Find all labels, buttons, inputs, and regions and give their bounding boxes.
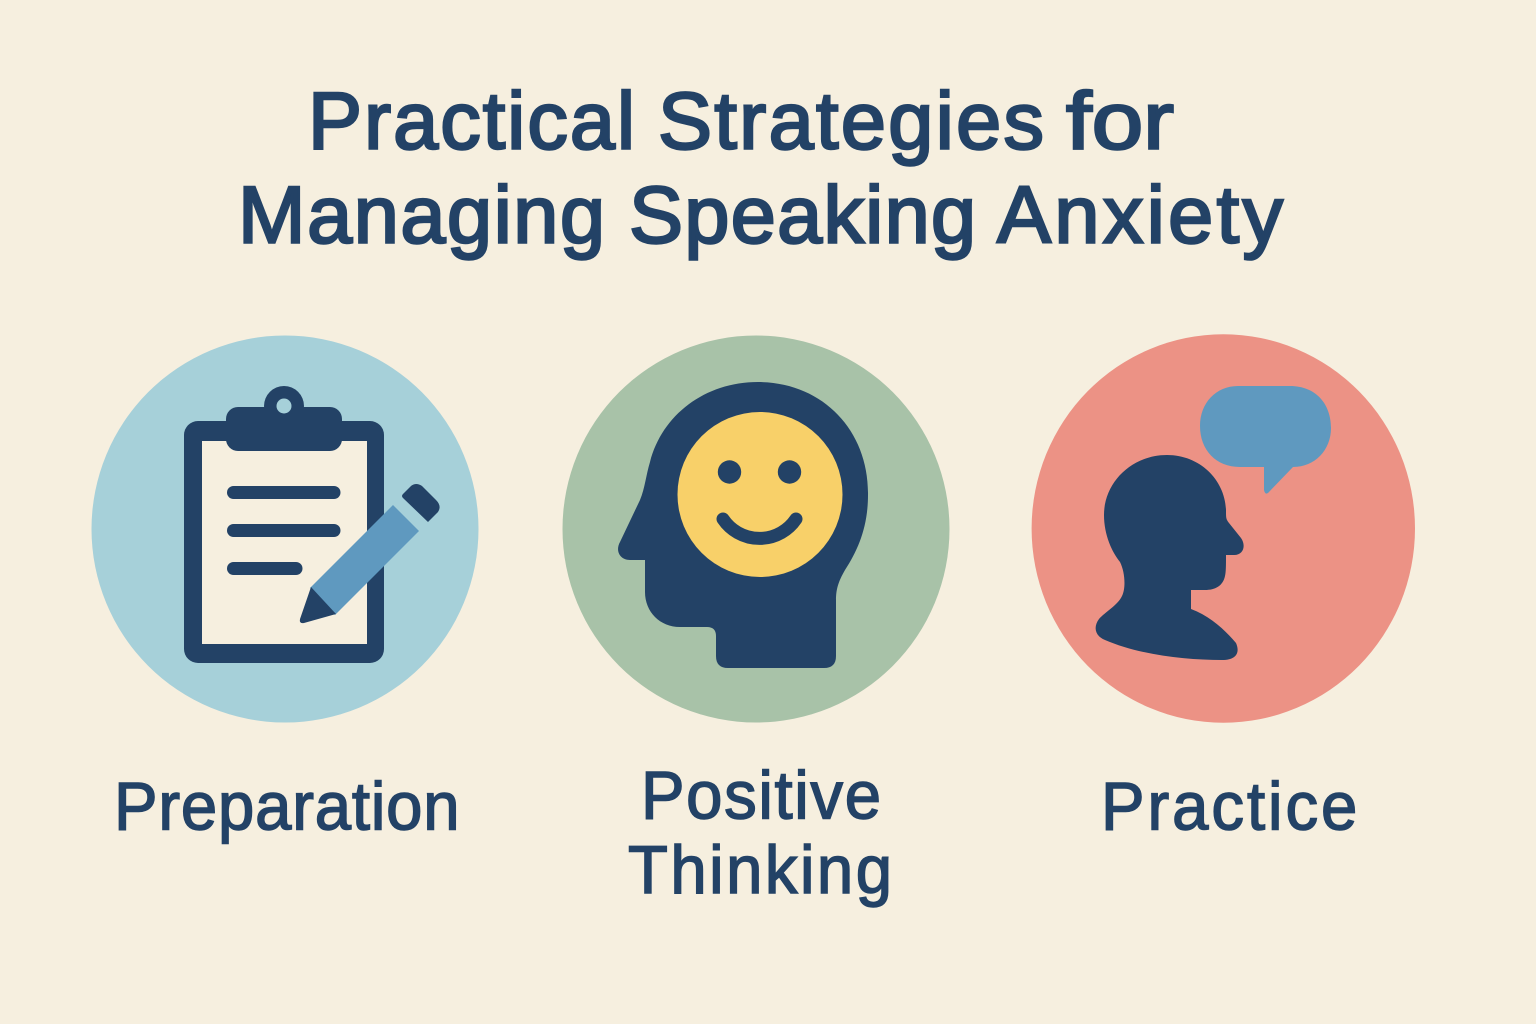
- icon: speaking head: [1096, 455, 1244, 660]
- label: positive thinking: Thinking: [628, 833, 892, 908]
- title: Speaking: [629, 170, 976, 260]
- label: preparation: Preparation: [114, 769, 460, 845]
- title: [238, 76, 1284, 260]
- title: Anxiety: [997, 170, 1284, 260]
- title: Practical: [308, 76, 635, 166]
- title: Strategies: [658, 76, 1044, 166]
- icon circle: practice: [1032, 334, 1415, 723]
- label: positive thinking: [628, 758, 892, 908]
- label: practice: Practice: [1101, 769, 1357, 845]
- icon circle: positive thinking: [562, 336, 950, 722]
- title: Managing: [238, 170, 605, 260]
- panel: positive thinking: [562, 336, 950, 908]
- title: for: [1066, 76, 1174, 166]
- icon circle: preparation: [92, 336, 478, 722]
- icon: speech bubble: [1200, 386, 1331, 494]
- panel: preparation: [92, 336, 478, 845]
- icon: head with smiling face: [618, 382, 868, 668]
- panel: practice: [1032, 334, 1415, 845]
- icon: clipboard and pencil: [184, 386, 440, 663]
- label: positive thinking: Positive: [641, 758, 881, 834]
